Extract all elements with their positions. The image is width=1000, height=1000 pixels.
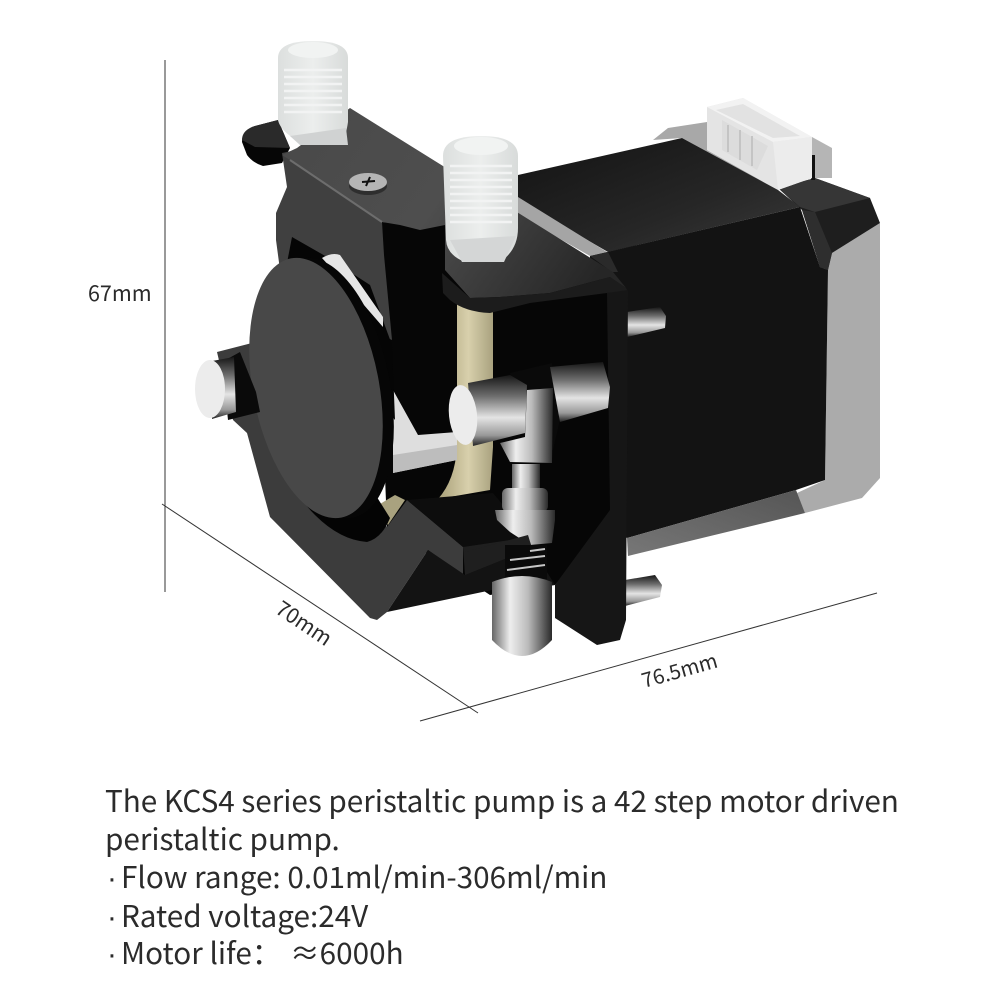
black ring <box>510 363 560 450</box>
ledge front <box>463 537 532 575</box>
chamfer highlight near bracket <box>590 252 618 272</box>
dimension line: width <box>420 593 877 721</box>
white connector <box>707 98 812 190</box>
spec: motor life: Motor life： <box>121 930 282 973</box>
description text <box>105 778 899 973</box>
ledge top <box>407 493 530 547</box>
motor side face <box>590 207 828 538</box>
grey laminate strip <box>518 197 607 256</box>
label: 76.5mm: 76.5mm <box>638 644 721 694</box>
bracket upper plate <box>282 108 626 298</box>
stepper motor <box>518 98 880 556</box>
white roller <box>393 390 457 473</box>
pump body lower face <box>217 343 463 620</box>
rear grey top strip <box>653 122 778 190</box>
upper roller glimpse <box>322 254 383 327</box>
intro line 1: The KCS4 series peristaltic pump is a 42 step motor driven <box>105 778 899 821</box>
bracket vertical right wall <box>555 290 628 645</box>
left shaft pin <box>195 352 260 420</box>
tube sliver under disc <box>375 495 405 525</box>
plate fold highlight <box>290 160 382 222</box>
spec: flow range: · <box>107 862 117 895</box>
bracket side wall <box>276 150 392 340</box>
spec: motor life: · <box>107 938 117 971</box>
dimension line: depth <box>162 504 478 713</box>
spec: rated voltage: Rated voltage:24V <box>121 893 369 936</box>
right mounting pin lower <box>625 575 662 606</box>
motor top face <box>518 138 800 252</box>
clear fitting front <box>443 136 518 262</box>
dimension line: height <box>164 60 166 592</box>
right cylinder <box>550 362 610 422</box>
cylinder face <box>446 384 480 446</box>
clear fitting rear <box>278 41 348 145</box>
peristaltic tube <box>438 300 493 499</box>
spring <box>505 545 547 579</box>
connector clip <box>812 137 832 178</box>
label: 67mm: 67mm <box>88 277 152 308</box>
rear cap top <box>778 178 880 270</box>
right mounting pin upper <box>627 307 666 337</box>
disc rim <box>242 247 414 529</box>
tab behind bracket <box>242 120 290 166</box>
plate front lip <box>442 273 628 313</box>
spec: flow range: Flow range: 0.01ml/min-306ml/min <box>121 854 607 897</box>
intro line 2: peristaltic pump. <box>105 816 340 859</box>
shaft <box>512 464 540 492</box>
lower cylinder <box>492 576 552 656</box>
flange and cone <box>495 510 555 545</box>
bottom ledge <box>387 493 555 612</box>
ledge underside <box>387 548 555 612</box>
lower grey edge <box>627 490 805 556</box>
dark inner housing <box>382 222 612 595</box>
wall opening <box>286 237 395 420</box>
front cylinder <box>468 375 527 446</box>
spec: motor life: ≈6000h <box>290 930 404 973</box>
label: 70mm: 70mm <box>270 593 338 653</box>
spec: rated voltage: · <box>107 901 117 934</box>
phillips screw <box>349 173 387 195</box>
disc face <box>229 246 403 530</box>
collar <box>502 488 548 512</box>
elbow <box>500 388 553 463</box>
crescent slot <box>277 452 390 542</box>
motor rear grey cap <box>797 223 880 513</box>
spring-loaded lever assembly <box>446 362 610 656</box>
ledge front lip over cone <box>465 535 532 575</box>
